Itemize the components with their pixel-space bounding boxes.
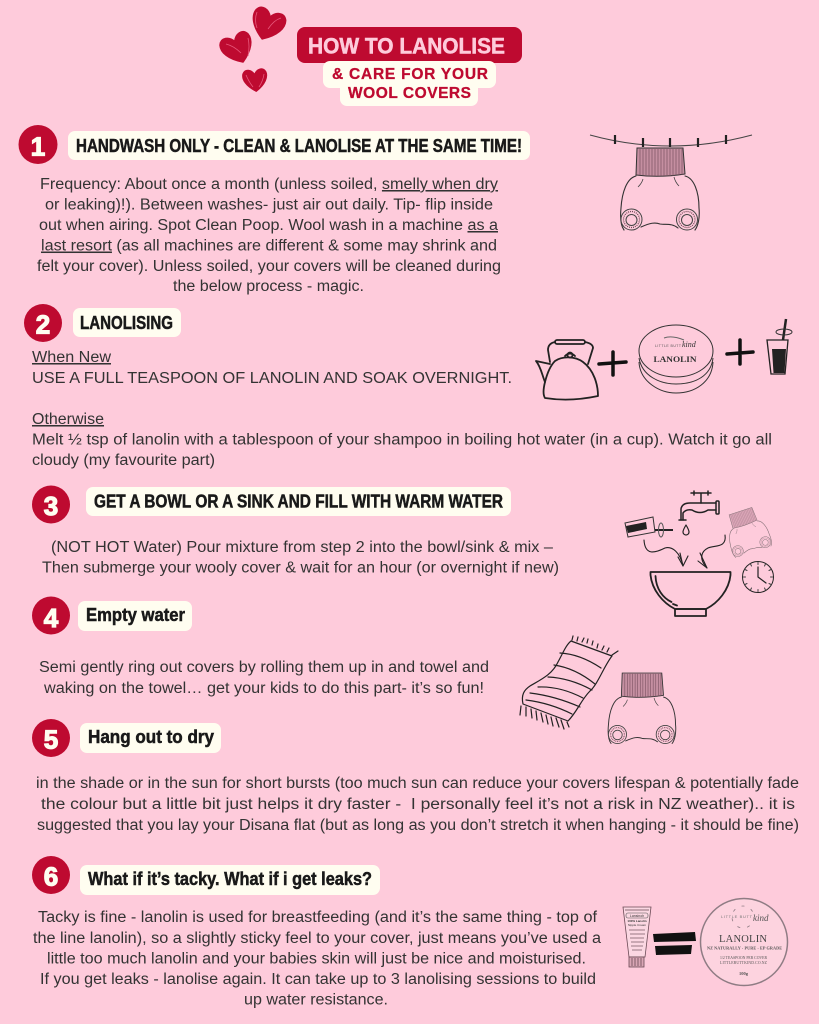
icon: lanolin tube: 100% Lanolin xyxy=(627,919,647,923)
step 6 text: up water resistance. xyxy=(244,992,388,1008)
step 2 text: When New xyxy=(32,349,112,366)
step 4 heading xyxy=(78,601,192,631)
title xyxy=(297,27,522,63)
step 6 number xyxy=(32,856,70,894)
step 6 text: Tacky is fine - lanolin is used for breastfeeding (and it’s the same thing - top of xyxy=(38,909,598,926)
step 1 number xyxy=(18,125,58,164)
icon: lanolin tin xyxy=(639,325,713,393)
icon: lanolin tin: LANOLIN xyxy=(654,354,697,364)
step 5 heading: Hang out to dry xyxy=(88,727,214,747)
step 1 text: last resort (as all machines are different & some may shrink and xyxy=(41,238,497,254)
step 2 heading: LANOLISING xyxy=(80,313,173,333)
step 3 heading: GET A BOWL OR A SINK AND FILL WITH WARM WATER xyxy=(94,492,503,512)
subtitle: WOOL COVERS xyxy=(348,85,471,102)
step 1 text: Frequency: About once a month (unless soiled, smelly when dry xyxy=(40,176,498,193)
icon: lanolin label: LITTLEBUTTKIND.CO.NZ xyxy=(720,961,768,965)
step 1 text: the below process - magic. xyxy=(173,278,364,295)
step 1 text xyxy=(37,176,501,295)
step 5 text xyxy=(36,775,799,834)
icon: lanolin label: NZ NATURALLY · PURE · EP GRADE xyxy=(707,946,782,950)
step 2 heading xyxy=(73,308,181,337)
step 6 text: little too much lanolin and your babies skin will just be nice and moisturised. xyxy=(47,950,586,968)
icon: kettle xyxy=(536,340,598,400)
step 4 number xyxy=(32,596,70,634)
step 1 number: 1 xyxy=(31,132,45,162)
step 6 number: 6 xyxy=(44,862,58,892)
step 2 number xyxy=(24,304,62,342)
step 5 heading xyxy=(80,723,221,753)
icon: tilted small cover xyxy=(721,505,773,558)
step 2 text xyxy=(32,349,772,469)
icon: lanolin label xyxy=(700,898,788,986)
step 2 text: Otherwise xyxy=(32,411,104,428)
icon: clock xyxy=(742,562,774,592)
step 5 text: in the shade or in the sun for short bursts (too much sun can reduce your covers lifespan & potentially fade xyxy=(36,775,799,792)
step 3 text xyxy=(42,539,559,576)
icon: equals xyxy=(653,932,696,955)
icon: lanolin label: 100g xyxy=(739,971,749,976)
step 1 text: or leaking)!). Between washes- just air out daily. Tip- flip inside xyxy=(45,196,493,214)
icon: lanolin tube: Nipple Cream xyxy=(628,923,647,927)
icon: lanolin tin: kind xyxy=(682,340,697,349)
icon: cover on clothesline xyxy=(590,135,752,230)
arrow: cup to bowl xyxy=(644,540,688,566)
icon: cup with straw xyxy=(767,319,792,374)
step 5 text: the colour but a little bit just helps it dry faster - I personally feel it’s not a risk in NZ weather).. it is xyxy=(41,796,795,813)
icon: lanolin tin: LITTLE BUTT xyxy=(655,344,682,348)
icon: tap xyxy=(679,491,719,535)
icon: bowl xyxy=(650,572,730,616)
step 3 text: Then submerge your wooly cover & wait for an hour (or overnight if new) xyxy=(42,560,559,576)
icon: tilted cup xyxy=(625,517,673,537)
step 1 text: out when airing. Spot Clean Poop. Wool wash in a machine as a xyxy=(39,217,499,234)
step 3 heading xyxy=(86,487,511,516)
subtitle xyxy=(323,61,496,106)
step 4 number: 4 xyxy=(44,603,59,633)
step 1 heading: HANDWASH ONLY - CLEAN & LANOLISE AT THE SAME TIME! xyxy=(76,136,522,156)
title: HOW TO LANOLISE xyxy=(308,34,505,58)
icon: lanolin label: kind xyxy=(753,913,769,923)
step 5 number xyxy=(32,719,70,757)
step 6 text xyxy=(33,909,602,1008)
icon: lanolin label: LITTLE BUTT xyxy=(721,914,753,919)
icon: cover xyxy=(608,673,676,744)
step 3 number xyxy=(32,486,70,524)
icon: lanolin tube xyxy=(623,907,651,967)
icon: lanolin label: LANOLIN xyxy=(719,934,767,945)
icon: plus xyxy=(599,352,626,375)
step 6 heading xyxy=(80,865,380,895)
step 1 heading xyxy=(68,131,530,160)
step 4 text: waking on the towel… get your kids to do this part- it’s so fun! xyxy=(43,680,484,697)
step 4 text xyxy=(39,659,489,697)
step 2 number: 2 xyxy=(36,310,50,340)
step 6 text: the line lanolin), so a slightly sticky feel to your cover, just means you’ve used a xyxy=(33,930,602,947)
step 6 heading: What if it’s tacky. What if i get leaks? xyxy=(88,869,372,889)
icon: lanolin label: 1/2 TEASPOON PER COVER xyxy=(720,956,767,960)
icon: hearts xyxy=(218,5,288,92)
step 2 text: Melt ½ tsp of lanolin with a tablespoon of your shampoo in boiling hot water (in a cup). Watch it go all xyxy=(32,432,772,448)
step 6 text: If you get leaks - lanolise again. It can take up to 3 lanolising sessions to build xyxy=(40,971,596,988)
icon: towel xyxy=(520,636,618,729)
step 3 text: (NOT HOT Water) Pour mixture from step 2 into the bowl/sink & mix – xyxy=(51,539,554,556)
icon: lanolin tube: Lansinoh xyxy=(630,914,644,918)
step 2 text: cloudy (my favourite part) xyxy=(32,452,215,469)
arrow: cover to bowl xyxy=(698,535,725,568)
step 2 text: USE A FULL TEASPOON OF LANOLIN AND SOAK OVERNIGHT. xyxy=(32,370,512,387)
subtitle: & CARE FOR YOUR xyxy=(332,66,488,83)
step 4 heading: Empty water xyxy=(86,605,185,625)
step 5 text: suggested that you lay your Disana flat (but as long as you don’t stretch it when hanging - it should be fine) xyxy=(37,817,799,834)
icon: plus xyxy=(727,340,753,364)
step 5 number: 5 xyxy=(44,724,58,754)
step 3 number: 3 xyxy=(44,491,58,521)
step 4 text: Semi gently ring out covers by rolling them up in and towel and xyxy=(39,659,489,676)
step 1 text: felt your cover). Unless soiled, your covers will be cleaned during xyxy=(37,258,501,275)
